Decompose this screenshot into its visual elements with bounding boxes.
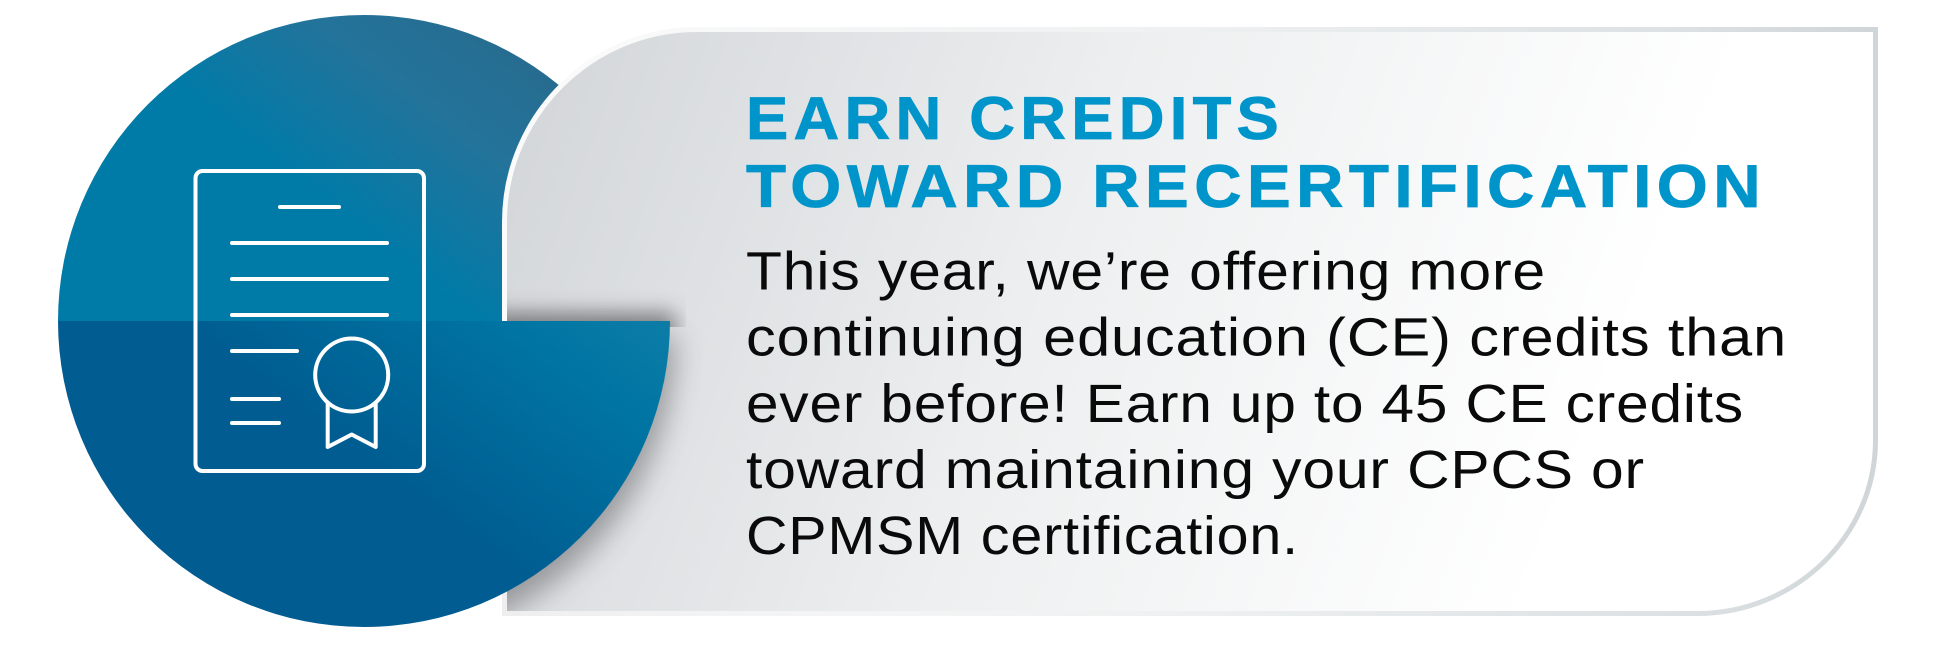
circle lower half [58, 321, 670, 627]
body text: ever before! Earn up to 45 CE credits [746, 374, 1744, 434]
shadows cast on panel [507, 299, 690, 611]
panel: text card [502, 27, 1878, 616]
heading: EARN CREDITS [746, 84, 1284, 152]
body text: toward maintaining your CPCS or [746, 440, 1645, 500]
body text [746, 242, 1787, 566]
heading [746, 84, 1766, 220]
circle upper half [58, 15, 670, 321]
body text: This year, we’re offering more [746, 242, 1546, 302]
icon: certificate document with ribbon seal [196, 171, 424, 471]
heading: TOWARD RECERTIFICATION [746, 152, 1766, 220]
body text: continuing education (CE) credits than [746, 308, 1787, 368]
body text: CPMSM certification. [746, 506, 1299, 566]
